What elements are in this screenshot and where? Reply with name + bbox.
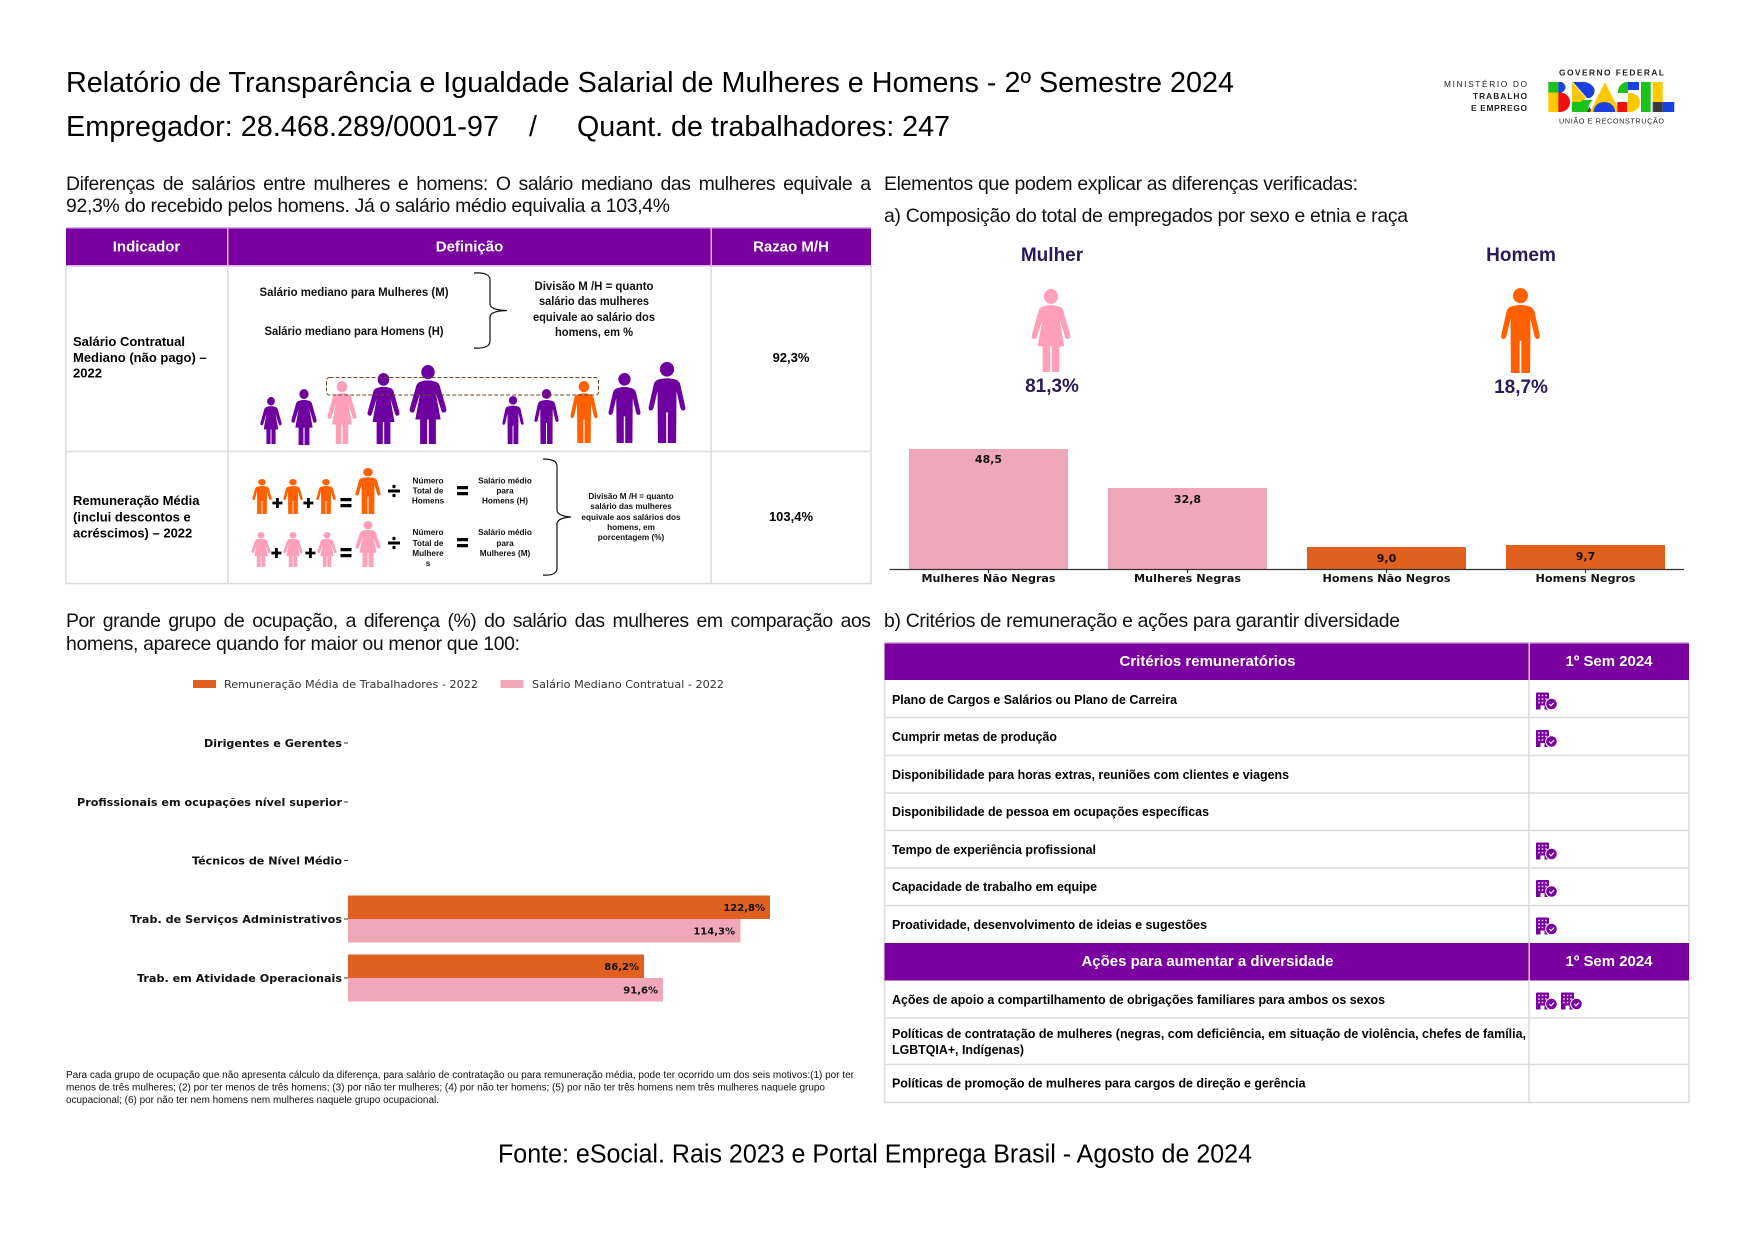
bar chart: ocupação: Dirigentes e Gerentes bbox=[204, 737, 342, 750]
formula: mulheres bbox=[251, 521, 532, 568]
title: Relatório de Transparência e Igualdade Salarial de Mulheres e Homens - 2º Semestre 2024 bbox=[66, 67, 1234, 99]
formula: homens: Homens bbox=[412, 496, 445, 506]
bar chart: composição: 48,5 bbox=[975, 453, 1002, 466]
formula: homens: Total de bbox=[413, 486, 444, 496]
panel: mulher bbox=[1021, 245, 1084, 397]
text block: por grande grupo: homens, aparece quando for maior ou menor que 100: bbox=[66, 633, 520, 655]
row: contratação: Políticas de contratação de mulheres (negras, com deficiência, em situação de violência, chefes de família, bbox=[892, 1026, 1526, 1041]
row: horas extras: Disponibilidade para horas extras, reuniões com clientes e viagens bbox=[892, 767, 1289, 782]
definition text: divisão média bbox=[581, 492, 681, 542]
heading: critérios: b) Critérios de remuneração e ações para garantir diversidade bbox=[884, 610, 1400, 632]
text block: diferenças de salários bbox=[66, 173, 871, 217]
bar chart: ocupação: 91,6% bbox=[623, 986, 658, 996]
formula: mulheres: Mulhere bbox=[412, 549, 444, 558]
row: contratação bbox=[892, 1026, 1526, 1057]
definition text: salário mediano: Salário mediano para Homens (H) bbox=[264, 324, 444, 338]
row: plano de cargos: Plano de Cargos e Salários ou Plano de Carreira bbox=[892, 692, 1178, 707]
bar chart: composição: 9,7 bbox=[1576, 550, 1595, 563]
row: apoio bbox=[892, 992, 1582, 1010]
panel: homem: 18,7% bbox=[1494, 377, 1548, 398]
icon row: mediana de homens bbox=[502, 362, 685, 444]
row: experiência bbox=[892, 842, 1557, 860]
logo text: ministério bbox=[1444, 79, 1527, 113]
brace: média bbox=[543, 459, 571, 575]
definition text: divisão média: equivale aos salários dos bbox=[581, 513, 681, 522]
table header: Indicador bbox=[113, 238, 180, 256]
text block: diferenças de salários: Diferenças de salários entre mulheres e homens: O salário mediano das mulheres equivale a bbox=[66, 173, 871, 195]
title bbox=[66, 67, 1234, 143]
bar chart: composição: Homens Negros bbox=[1536, 572, 1636, 585]
logo text: ministério: MINISTÉRIO DO bbox=[1444, 79, 1527, 89]
panel: homem: Homem bbox=[1486, 245, 1556, 266]
value: razão média: 103,4% bbox=[769, 509, 813, 524]
row label: salário contratual: Mediano (não pago) – bbox=[73, 350, 207, 365]
row label: remuneração média: acréscimos) – 2022 bbox=[73, 526, 192, 540]
header: ações: Ações para aumentar a diversidade bbox=[1082, 953, 1334, 970]
value: razão mediana: 92,3% bbox=[773, 350, 810, 365]
header: critérios remuneratórios: Critérios remuneratórios bbox=[1120, 653, 1296, 670]
panel: mulher: Mulher bbox=[1021, 245, 1084, 266]
bar chart: ocupação bbox=[77, 737, 770, 1002]
row: metas: Cumprir metas de produção bbox=[892, 729, 1057, 744]
definition text: divisão M/H: salário das mulheres bbox=[539, 294, 649, 308]
formula: mulheres: Mulheres (M) bbox=[480, 549, 531, 558]
table header: Definição bbox=[436, 238, 503, 256]
title: Quant. de trabalhadores: 247 bbox=[577, 111, 950, 143]
bar chart: ocupação: Trab. em Atividade Operacionais bbox=[137, 972, 342, 985]
footnote: ocupacional; (6) por não ter nem homens nem mulheres naquele grupo ocupacional. bbox=[66, 1095, 439, 1106]
brace: mediano bbox=[474, 273, 507, 348]
bar chart: ocupação: Técnicos de Nível Médio bbox=[192, 854, 342, 868]
text block: por grande grupo bbox=[66, 610, 871, 655]
bar chart: ocupação: 122,8% bbox=[723, 903, 765, 914]
row label: salário contratual bbox=[73, 334, 207, 380]
definition text: divisão M/H bbox=[533, 279, 655, 339]
definition text: salário mediano: Salário mediano para Mulheres (M) bbox=[260, 285, 448, 299]
definition text: divisão M/H: Divisão M /H = quanto bbox=[534, 279, 654, 293]
logo text: ministério: E EMPREGO bbox=[1471, 103, 1527, 113]
header: ações bbox=[884, 943, 1689, 980]
logo mark: Brasil bbox=[1548, 82, 1674, 112]
definition text: divisão média: salário das mulheres bbox=[590, 502, 672, 511]
table header: Razao M/H bbox=[753, 238, 829, 256]
row: contratação: LGBTQIA+, Indígenas) bbox=[892, 1042, 1024, 1057]
bar chart: ocupação: 86,2% bbox=[604, 962, 639, 973]
dashed highlight bbox=[326, 378, 598, 395]
panel: tabela de critérios bbox=[884, 642, 1689, 1102]
row: proatividade bbox=[892, 917, 1557, 935]
logo text: governo federal: GOVERNO FEDERAL bbox=[1559, 68, 1664, 78]
row: metas bbox=[892, 729, 1557, 747]
row label: remuneração média: (inclui descontos e bbox=[73, 509, 191, 524]
bar chart: composição: 32,8 bbox=[1174, 493, 1201, 506]
formula: mulheres: Total de bbox=[413, 539, 444, 548]
text block: por grande grupo: Por grande grupo de ocupação, a diferença (%) do salário das mulheres em comparação aos bbox=[66, 610, 871, 632]
header: critérios remuneratórios: 1º Sem 2024 bbox=[1566, 653, 1653, 670]
footnote bbox=[66, 1070, 855, 1106]
row: promoção: Políticas de promoção de mulheres para cargos de direção e gerência bbox=[892, 1076, 1306, 1090]
footnote: Para cada grupo de ocupação que não apresenta cálculo da diferença, para salário de contratação ou para remuneração média, pode ter ocorrido um dos seis motivos:(1) por ter bbox=[66, 1070, 855, 1081]
bar chart: composição: Mulheres Não Negras bbox=[922, 572, 1056, 585]
footnote: menos de três mulheres; (2) por ter menos de três homens; (3) por não ter mulheres; (4) por não ter homens; (5) por não ter três homens nem três mulheres naquele grupo bbox=[66, 1082, 825, 1094]
formula: mulheres: para bbox=[496, 539, 514, 548]
header: critérios remuneratórios bbox=[884, 642, 1689, 680]
definition text: divisão M/H: homens, em % bbox=[555, 325, 633, 339]
formula: homens: Homens (H) bbox=[482, 496, 528, 506]
definition text: salário mediano bbox=[260, 285, 448, 338]
row: plano de cargos bbox=[892, 692, 1557, 710]
formula: homens: Salário médio bbox=[478, 476, 532, 486]
row label: salário contratual: 2022 bbox=[73, 366, 102, 380]
row label: remuneração média: Remuneração Média bbox=[73, 493, 200, 508]
panel: tabela de indicadores bbox=[66, 227, 871, 584]
logo text: união e reconstrução: UNIÃO E RECONSTRUÇÃO bbox=[1559, 116, 1664, 125]
table header bbox=[66, 227, 871, 266]
bar chart: ocupação: Profissionais em ocupações nível superior bbox=[77, 796, 343, 809]
legend: Remuneração Média de Trabalhadores - 2022 bbox=[224, 678, 478, 691]
logo: ministério e governo federal bbox=[1444, 68, 1674, 125]
row: experiência: Tempo de experiência profissional bbox=[892, 842, 1096, 857]
definition text: divisão média: homens, em bbox=[607, 523, 655, 532]
row: proatividade: Proatividade, desenvolvimento de ideias e sugestões bbox=[892, 917, 1207, 932]
panel: mulher: 81,3% bbox=[1025, 376, 1079, 397]
row: apoio: Ações de apoio a compartilhamento de obrigações familiares para ambos os sexos bbox=[892, 992, 1385, 1007]
source: Fonte: eSocial. Rais 2023 e Portal Emprega Brasil - Agosto de 2024 bbox=[498, 1140, 1252, 1168]
row label: salário contratual: Salário Contratual bbox=[73, 334, 185, 349]
legend: Salário Mediano Contratual - 2022 bbox=[532, 678, 724, 691]
header: ações: 1º Sem 2024 bbox=[1566, 953, 1653, 970]
bar chart: composição: Homens Não Negros bbox=[1322, 572, 1451, 585]
definition text: divisão média: Divisão M /H = quanto bbox=[588, 492, 674, 501]
bar chart: composição bbox=[890, 449, 1684, 585]
row: equipe bbox=[892, 879, 1557, 897]
icon row: mediana de mulheres bbox=[260, 365, 446, 445]
formula: mulheres: Salário médio bbox=[478, 528, 532, 537]
formula: mulheres: s bbox=[426, 559, 431, 568]
definition text: divisão M/H: equivale ao salário dos bbox=[533, 310, 655, 324]
title: Empregador: 28.468.289/0001-97 bbox=[66, 111, 499, 143]
formula: homens: Número bbox=[413, 476, 443, 486]
definition text: divisão média: porcentagem (%) bbox=[598, 533, 664, 542]
row: equipe: Capacidade de trabalho em equipe bbox=[892, 879, 1097, 894]
title: / bbox=[529, 111, 537, 143]
bar chart: composição: 9,0 bbox=[1377, 552, 1397, 565]
formula: homens bbox=[252, 468, 532, 514]
row: ocupações específicas: Disponibilidade de pessoa em ocupações específicas bbox=[892, 804, 1209, 819]
legend bbox=[193, 678, 724, 691]
formula: mulheres: Número bbox=[413, 528, 443, 537]
logo text: ministério: TRABALHO bbox=[1473, 91, 1527, 101]
heading: composição: a) Composição do total de empregados por sexo e etnia e raça bbox=[884, 205, 1408, 227]
row label: remuneração média bbox=[73, 493, 200, 540]
panel: homem bbox=[1486, 245, 1556, 398]
formula: homens: para bbox=[496, 486, 514, 496]
bar chart: composição: Mulheres Negras bbox=[1134, 572, 1241, 585]
heading: elementos: Elementos que podem explicar as diferenças verificadas: bbox=[884, 173, 1358, 195]
bar chart: ocupação: 114,3% bbox=[693, 926, 735, 938]
bar chart: ocupação: Trab. de Serviços Administrativos bbox=[130, 913, 342, 926]
text block: diferenças de salários: 92,3% do recebido pelos homens. Já o salário médio equivalia a 103,4% bbox=[66, 195, 670, 217]
